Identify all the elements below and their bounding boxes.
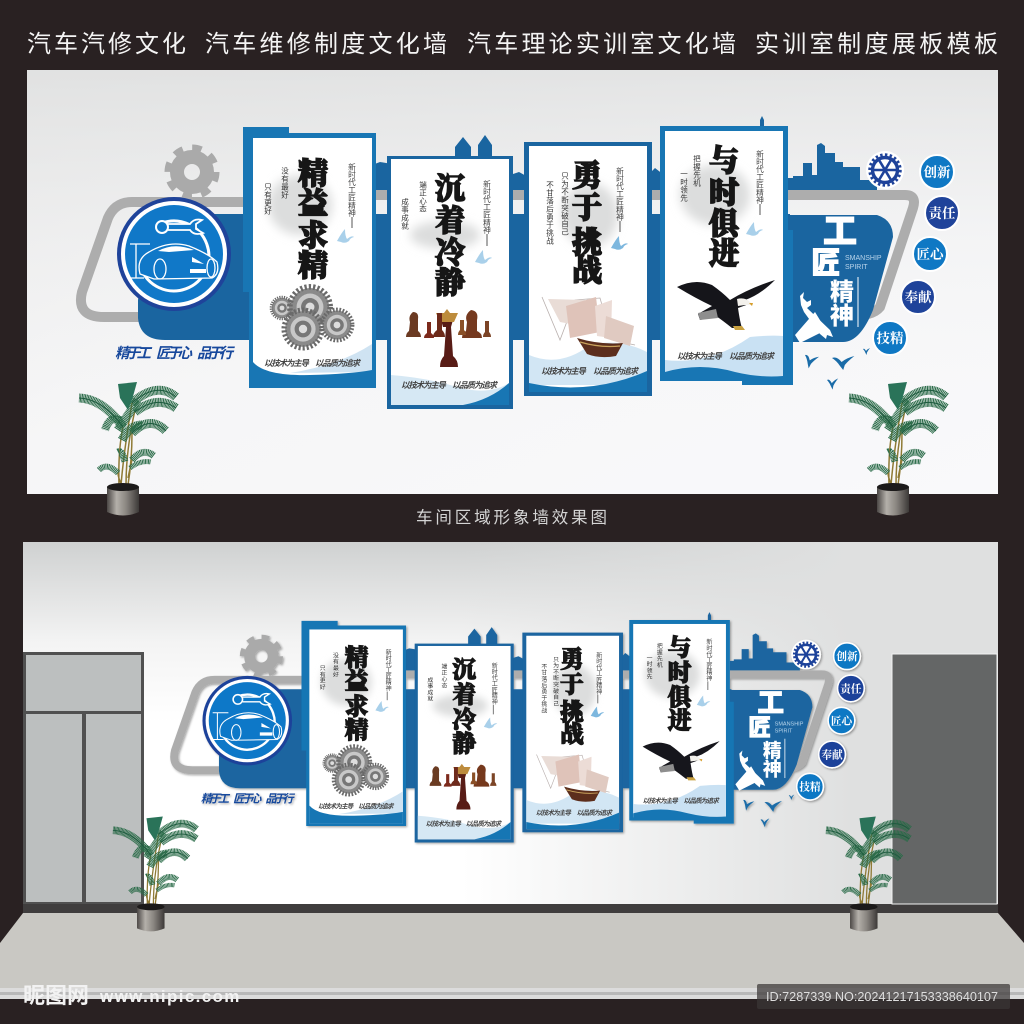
panel: 精益求精: 精 (345, 716, 369, 744)
heading: 工匠精神: 神 (763, 758, 782, 780)
icon: wrench (795, 292, 833, 343)
panel: 精益求精: 新时代工匠精神 (347, 162, 356, 218)
heading: 工匠精神: 精 (763, 739, 782, 761)
panel: 勇于挑战: 新时代工匠精神 (615, 166, 624, 222)
panel: 勇于挑战: 以品质为追求 (577, 809, 613, 817)
tagline (201, 792, 295, 805)
title: 汽车汽修文化 (27, 31, 186, 58)
title: 汽车维修制度文化墙 (205, 31, 447, 58)
panel: 精益求精: 以技术为主导 (264, 358, 310, 368)
panel: 与时俱进 (629, 620, 734, 824)
panel: 与时俱进: 把握先机 (655, 642, 662, 669)
skyline (372, 116, 877, 192)
heading: 工匠精神: 神 (830, 303, 854, 330)
panel: 与时俱进: 一时领先 (645, 655, 652, 681)
badges (797, 643, 864, 800)
blue craftsman shape (728, 690, 812, 790)
panel: 勇于挑战: 于 (572, 192, 602, 225)
panel: 与时俱进: 以技术为主导 (643, 797, 678, 805)
tagline: 精于工 (115, 345, 152, 362)
skyline (403, 612, 800, 672)
heading: 工匠精神: 匠 (748, 715, 771, 741)
panel: 勇于挑战: 以技术为主导 (541, 366, 587, 376)
panel: 精益求精 (243, 127, 376, 388)
heading: 工匠精神: 工 (823, 213, 857, 251)
panel: 精益求精: 益 (345, 668, 369, 695)
panel: 精益求精: 求 (345, 693, 368, 720)
icon: grey gear (168, 148, 216, 196)
badges: 创新 (924, 164, 951, 180)
panel: 与时俱进: 俱 (668, 684, 693, 711)
panel: 沉着冷静: 着 (452, 682, 476, 709)
heading: 工匠精神: SMANSHIP (775, 721, 804, 727)
heading: 工匠精神: 匠 (811, 248, 841, 280)
tagline: 品于行 (265, 792, 295, 805)
panel: 与时俱进: 进 (709, 238, 739, 271)
panel: 与时俱进: 一时领先 (679, 170, 688, 203)
tagline: 精于工 (201, 792, 231, 805)
panel: 与时俱进: 新时代工匠精神 (705, 638, 712, 683)
panel: 与时俱进: 以品质为追求 (683, 797, 720, 805)
badges (873, 155, 959, 355)
heading: 工匠精神: 精 (830, 279, 854, 306)
heading: 工匠精神: SPIRIT (775, 728, 793, 734)
panel: upper flat wall (27, 70, 998, 494)
badges: 匠心 (916, 247, 946, 262)
panel: 勇于挑战: 只为不断突破自己 (552, 656, 559, 706)
icon: birds (802, 348, 870, 390)
badges: 创新 (836, 650, 858, 663)
panel: 沉着冷静: 冷 (435, 236, 465, 270)
panel: 精益求精: 精 (345, 644, 369, 672)
badges: 奉献 (904, 289, 933, 305)
car logo (202, 676, 292, 765)
car logo (117, 197, 231, 311)
panel: 与时俱进: 俱 (709, 208, 741, 241)
badges: 匠心 (831, 715, 853, 728)
panel: 勇于挑战: 以技术为主导 (536, 809, 572, 817)
panel: 沉着冷静: 冷 (452, 706, 476, 734)
panel: 与时俱进: 新时代工匠精神 (755, 149, 764, 205)
wall art: rendered scene (174, 612, 864, 842)
panel: 沉着冷静: 沉 (452, 656, 476, 683)
panel: 沉着冷静: 着 (435, 205, 465, 238)
panel: 勇于挑战: 战 (572, 255, 602, 288)
icon: blue wheel gear (791, 640, 821, 670)
panel: 勇于挑战: 于 (560, 671, 584, 698)
badges: 技精 (876, 330, 904, 346)
heading: 工匠精神 (811, 213, 882, 330)
wall art: upper flat design (81, 116, 959, 409)
icon: plant lower left (113, 817, 196, 931)
panel: 勇于挑战: 战 (560, 721, 584, 748)
watermark: site logo: www.nipic.com (99, 987, 240, 1006)
heading: 工匠精神: SPIRIT (845, 264, 868, 271)
left door (23, 652, 144, 904)
icon: birds (741, 795, 794, 827)
badges: 责任 (928, 205, 956, 221)
panel: 沉着冷静 (415, 644, 514, 842)
panel: rendered wall scene (0, 542, 1024, 999)
blue band (138, 214, 790, 340)
icon: plant upper left (79, 382, 176, 516)
panel: 沉着冷静: 以品质为追求 (466, 820, 503, 828)
panel: 与时俱进: 把握先机 (692, 154, 702, 188)
panel: 沉着冷静 (387, 156, 513, 409)
icon: plant lower right (826, 817, 909, 931)
blue band (219, 689, 731, 788)
tagline: 匠于心 (156, 345, 192, 362)
watermark: site logo (23, 983, 240, 1008)
heading: 工匠精神: 工 (757, 688, 784, 718)
panel: 精益求精: 以品质为追求 (358, 803, 395, 811)
panel: 沉着冷静: 成事成就 (400, 197, 410, 231)
badges: 奉献 (821, 748, 844, 761)
title: 汽车理论实训室文化墙 (467, 31, 736, 58)
watermark: image id (757, 984, 1010, 1009)
watermark: site logo: 昵图网 (23, 983, 89, 1008)
panel: 勇于挑战: 勇 (572, 160, 602, 193)
panel: 与时俱进: 进 (668, 708, 692, 735)
caption: 车间区域形象墙效果图 (416, 508, 607, 527)
panel: 勇于挑战 (522, 633, 623, 832)
title: 实训室制度展板模板 (755, 31, 998, 58)
blue craftsman shape (786, 215, 893, 342)
panel: 勇于挑战 (524, 142, 652, 396)
panel: 与时俱进: 时 (709, 177, 739, 210)
icon: plant upper right (849, 382, 946, 516)
panel: 勇于挑战: 挑 (560, 698, 585, 726)
panel: 精益求精: 只有更好 (263, 183, 272, 216)
panel: 沉着冷静: 沉 (435, 173, 465, 206)
panel: 沉着冷静: 端正心态 (440, 662, 447, 688)
panel: 勇于挑战: 挑 (572, 227, 604, 260)
panel: 勇于挑战: 以品质为追求 (593, 366, 640, 376)
panel: 勇于挑战: 新时代工匠精神 (595, 652, 602, 696)
panel: 精益求精: 求 (298, 220, 328, 253)
panel: 与时俱进: 时 (668, 660, 692, 687)
panel: 沉着冷静: 以技术为主导 (401, 380, 447, 390)
grey frame band (81, 195, 914, 317)
tagline (115, 345, 236, 362)
tagline: 品于行 (197, 345, 236, 362)
panel: 沉着冷静: 以技术为主导 (426, 820, 461, 828)
panel: 精益求精: 新时代工匠精神 (384, 648, 391, 693)
panel: 与时俱进: 与 (668, 634, 691, 661)
tagline: 匠于心 (233, 792, 262, 805)
panel: 与时俱进: 以技术为主导 (677, 351, 723, 361)
panel: 精益求精: 以品质为追求 (315, 358, 362, 368)
grey frame band (174, 674, 829, 770)
heading: 工匠精神 (748, 688, 804, 780)
panel: 沉着冷静: 静 (435, 267, 465, 300)
panel: 勇于挑战: 只为不断突破自己 (560, 172, 570, 236)
icon: wrench (735, 751, 765, 791)
panel: 精益求精: 精 (298, 158, 328, 191)
panel: 精益求精: 精 (298, 250, 328, 283)
panel: 沉着冷静: 静 (452, 730, 476, 757)
panel: 沉着冷静: 成事成就 (426, 676, 433, 703)
panel: 与时俱进 (660, 126, 793, 385)
panel: 精益求精: 只有更好 (318, 665, 325, 691)
panel: 沉着冷静: 新时代工匠精神 (490, 662, 497, 706)
panel: 精益求精: 益 (298, 188, 329, 221)
panel: 精益求精: 没有最好 (332, 651, 338, 678)
panel: 精益求精 (301, 621, 406, 826)
icon: blue wheel gear (866, 151, 904, 189)
heading: 工匠精神: SMANSHIP (845, 255, 882, 262)
panel: 勇于挑战: 勇 (560, 646, 584, 673)
badges: 技精 (799, 781, 821, 794)
icon: grey gear (243, 637, 280, 675)
panel: 勇于挑战: 不甘落后勇于挑战 (545, 181, 554, 246)
right door (892, 654, 997, 904)
panel: 沉着冷静: 新时代工匠精神 (482, 179, 492, 235)
panel: 精益求精: 没有最好 (280, 166, 290, 200)
panel: 精益求精: 以技术为主导 (318, 803, 354, 811)
panel: 与时俱进: 与 (709, 145, 739, 178)
panel: 勇于挑战: 不甘落后勇于挑战 (540, 663, 547, 714)
panel: 沉着冷静: 以品质为追求 (452, 380, 499, 390)
badges: 责任 (840, 682, 862, 695)
title (27, 31, 998, 58)
watermark: image id: ID:7287339 NO:20241217153338640107 (766, 989, 998, 1004)
panel: 沉着冷静: 端正心态 (418, 180, 428, 213)
panel: 与时俱进: 以品质为追求 (729, 351, 776, 361)
